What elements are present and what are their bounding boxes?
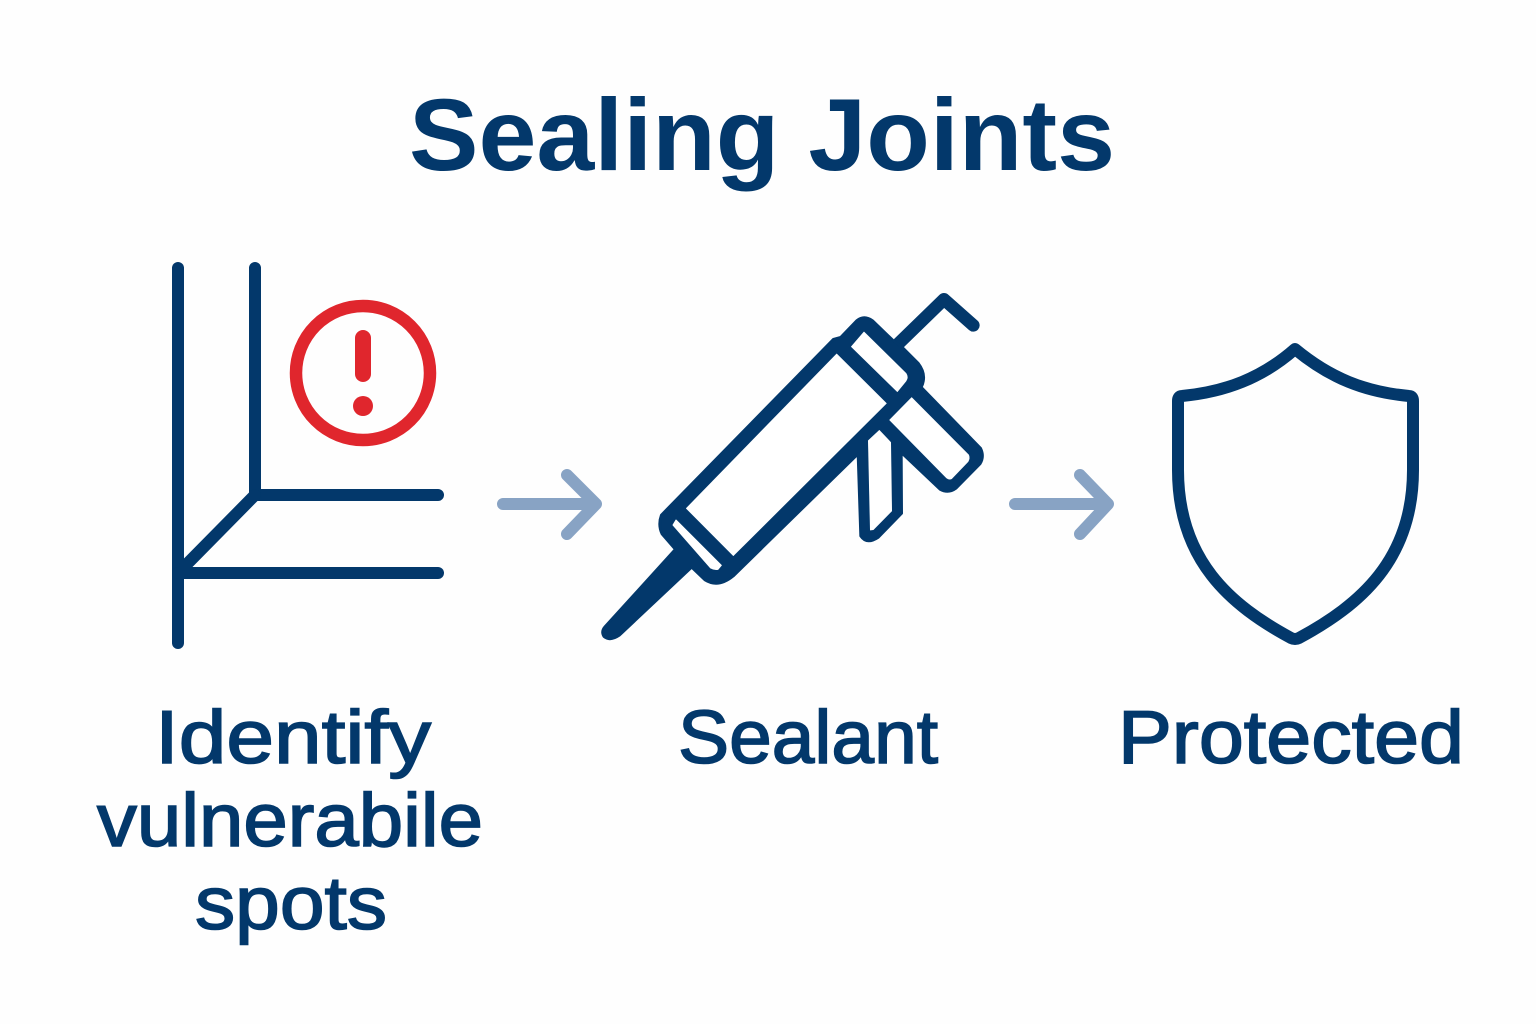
trigger opening: [868, 430, 892, 530]
gun silhouette: [603, 318, 983, 639]
icon: wall joint with warning: [178, 268, 438, 643]
nozzle collar opening: [673, 520, 721, 569]
rear cap opening: [851, 332, 907, 392]
barrel opening: [686, 354, 886, 556]
label: identify vulnerabile spots: spots: [195, 861, 387, 945]
icon: caulking gun: [603, 299, 983, 639]
icon: red warning circle: [296, 306, 430, 440]
label: protected: Protected: [1118, 695, 1464, 779]
label: identify vulnerabile spots: Identify: [155, 695, 432, 779]
label: identify vulnerabile spots: [97, 695, 483, 945]
arrow: identify to sealant: [503, 475, 596, 534]
gun hook rod: [897, 299, 973, 345]
handle opening: [890, 398, 969, 479]
label: sealant: Sealant: [678, 695, 938, 779]
label: identify vulnerabile spots: vulnerabile: [97, 778, 483, 862]
icon: shield: [1178, 349, 1413, 639]
title: Sealing Joints: [409, 78, 1115, 192]
icon: corner joint lines: [178, 268, 438, 643]
arrow: sealant to protected: [1015, 475, 1108, 534]
